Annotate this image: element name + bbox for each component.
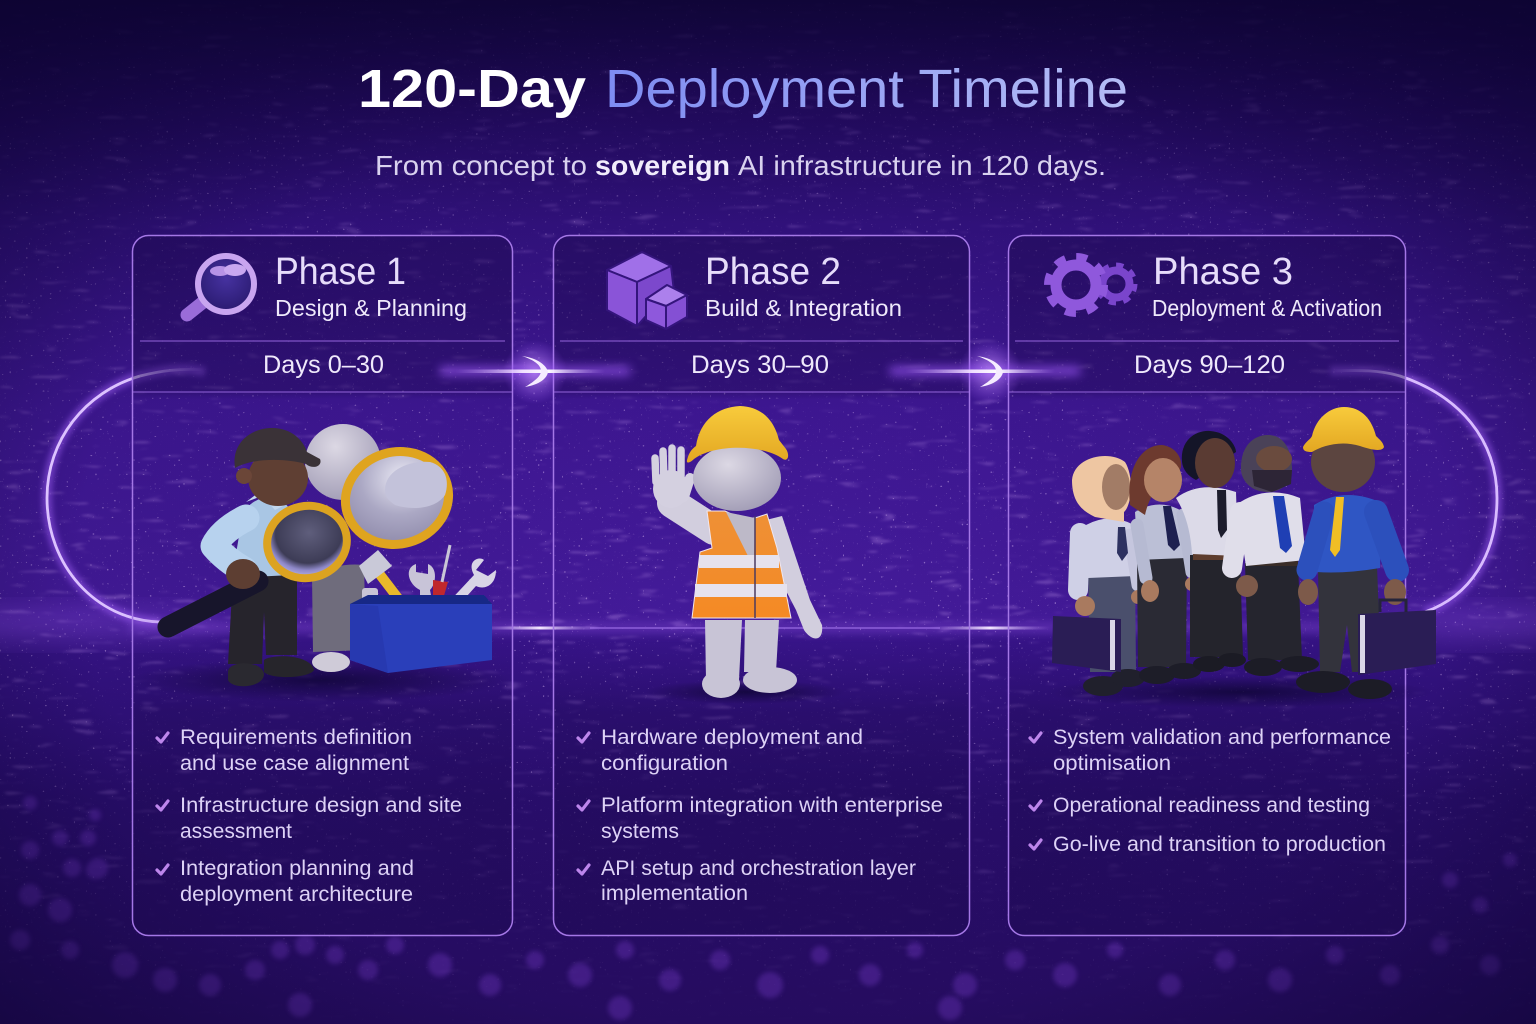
bullet 2.2: systems [601,820,679,843]
bullet 2.3 [578,857,916,905]
arrow: phase 1 to 2 [440,340,630,404]
vest [692,511,791,618]
days label: phase 3: Days 90–120 [1134,351,1285,379]
bullet 1.2: Infrastructure design and site [180,794,462,817]
subheading: phase 1: Design & Planning [275,295,467,321]
legs and boots [702,620,797,698]
bullet 1.2 [157,794,462,843]
bullet 3.1 [1030,726,1391,775]
subtitle: From concept to [375,150,587,181]
bullet 3.1: optimisation [1053,752,1171,775]
person: lead with hard hat [1296,407,1406,699]
silver handle and yellow grip [359,550,404,606]
panel 1 frame [132,236,512,936]
icon: cubes [607,252,687,329]
bullet 3.3: Go-live and transition to production [1053,833,1386,856]
bullet 1.3: Integration planning and [180,857,414,880]
panel: phase 2 [554,236,970,936]
bullet 2.1 [578,726,863,775]
bullet 2.3: API setup and orchestration layer [601,857,916,880]
person: bearded [1232,435,1319,676]
panel: phase 1 [132,236,512,936]
panel 1 dividers [133,341,512,392]
toolbox [350,595,492,673]
bullet 2.2 [578,794,943,843]
person: short hair [1176,431,1246,672]
magnifier large highlight [385,462,447,508]
heading: phase 2: Phase 2 [705,251,841,293]
lowered arm [766,516,822,638]
illustration: worker in safety vest [645,406,845,704]
bullet 2.2: Platform integration with enterprise [601,794,943,817]
bullet 2.1: configuration [601,752,728,775]
panel: phase 3 [1008,236,1406,936]
illustration: deployment team [1045,407,1436,708]
bullet list: phase 2 [578,726,943,905]
hard hat [687,406,788,463]
person: brown hair [1129,445,1201,684]
bullet 1.2: assessment [180,820,292,843]
panel 2 frame [554,236,970,936]
subheading: phase 2: Build & Integration [705,295,902,321]
handle black [168,581,258,627]
front figure [214,428,321,686]
icon: magnifier [187,256,254,315]
subtitle: AI infrastructure in 120 days. [738,150,1106,181]
bullet list: phase 1 [157,726,462,906]
magnifier small [260,498,354,586]
days label: phase 2: Days 30–90 [691,351,829,379]
title [358,59,1128,119]
bullet 3.2: Operational readiness and testing [1053,794,1370,817]
heading: phase 3: Phase 3 [1153,251,1293,293]
arrow: phase 2 to 3 [890,340,1080,404]
title: Deployment Timeline [605,59,1128,119]
hand [226,559,260,589]
subheading: phase 3: Deployment & Activation [1152,295,1382,321]
icon: gears [1048,258,1134,312]
back figure [305,424,381,672]
subtitle: sovereign [595,150,730,181]
bullet 1.1 [157,726,412,775]
panel 3 dividers [1009,341,1405,392]
bullet 1.3: deployment architecture [180,883,413,906]
bullet 1.1: Requirements definition [180,726,412,749]
bullet 3.1: System validation and performance [1053,726,1391,749]
bullet 2.1: Hardware deployment and [601,726,863,749]
days label: phase 1: Days 0–30 [263,351,384,379]
raised arm and hand [653,448,714,530]
toolbox tools [409,545,496,606]
bullet 2.3: implementation [601,882,748,905]
bullet 1.1: and use case alignment [180,752,409,775]
panel 3 frame [1008,236,1406,936]
person: headscarf [1072,456,1145,696]
briefcase right [1358,600,1436,675]
head [693,445,781,511]
bullet list: phase 3 [1030,726,1391,856]
panel 2 dividers [554,341,969,392]
magnifier large [334,439,460,557]
title: 120-Day [358,59,586,119]
subtitle [375,150,1106,181]
heading: phase 1: Phase 1 [275,251,406,293]
illustration: inspectors with magnifiers and toolbox [130,424,510,702]
timeline loop [47,369,1497,632]
briefcase left [1052,616,1121,672]
bullet 1.3 [157,857,414,906]
